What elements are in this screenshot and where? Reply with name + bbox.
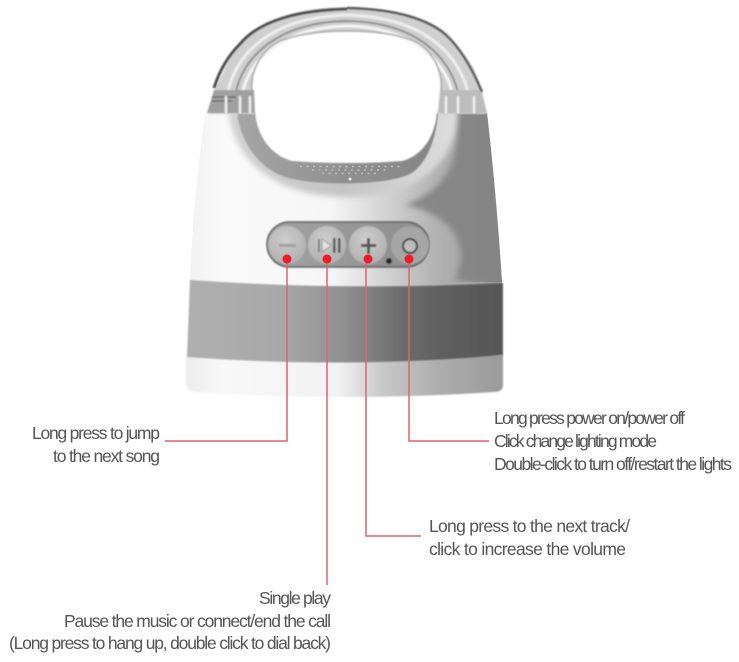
label: plus button: click to increase the volume	[429, 539, 626, 559]
recess	[237, 113, 438, 183]
upper body	[190, 113, 502, 288]
callout lines	[165, 259, 489, 585]
label: plus button	[429, 516, 630, 559]
dark right shoulder	[406, 113, 502, 282]
play pause button	[308, 226, 346, 264]
transparent handle	[207, 7, 487, 114]
grey band	[187, 280, 503, 363]
label: minus button: to the next song	[53, 446, 160, 466]
indicator dot	[348, 178, 352, 180]
label: power button: Double-click to turn off/restart the lights	[494, 454, 732, 474]
control panel	[267, 222, 429, 267]
label: power button: Long press power on/power off	[494, 408, 685, 428]
soft halo	[228, 110, 458, 197]
plus button	[349, 226, 387, 264]
label: play button	[9, 588, 331, 653]
label: play button: (Long press to hang up, double click to dial back)	[9, 633, 331, 653]
power button	[391, 226, 429, 264]
label: plus button: Long press to the next track/	[429, 516, 630, 536]
microphone hole	[386, 258, 392, 264]
handle opening	[255, 104, 437, 163]
red markers	[282, 254, 414, 264]
shading around handle opening	[228, 108, 510, 290]
label: power button	[494, 408, 732, 474]
label: minus button	[32, 423, 160, 466]
speaker grille dots	[300, 166, 400, 174]
lower base	[186, 355, 503, 397]
label: play button: Single play	[259, 588, 331, 608]
label: play button: Pause the music or connect/end the call	[64, 611, 331, 631]
label: minus button: Long press to jump	[32, 423, 160, 443]
label: power button: Click change lighting mode	[494, 431, 657, 451]
minus button	[268, 226, 306, 264]
speaker	[186, 7, 510, 397]
